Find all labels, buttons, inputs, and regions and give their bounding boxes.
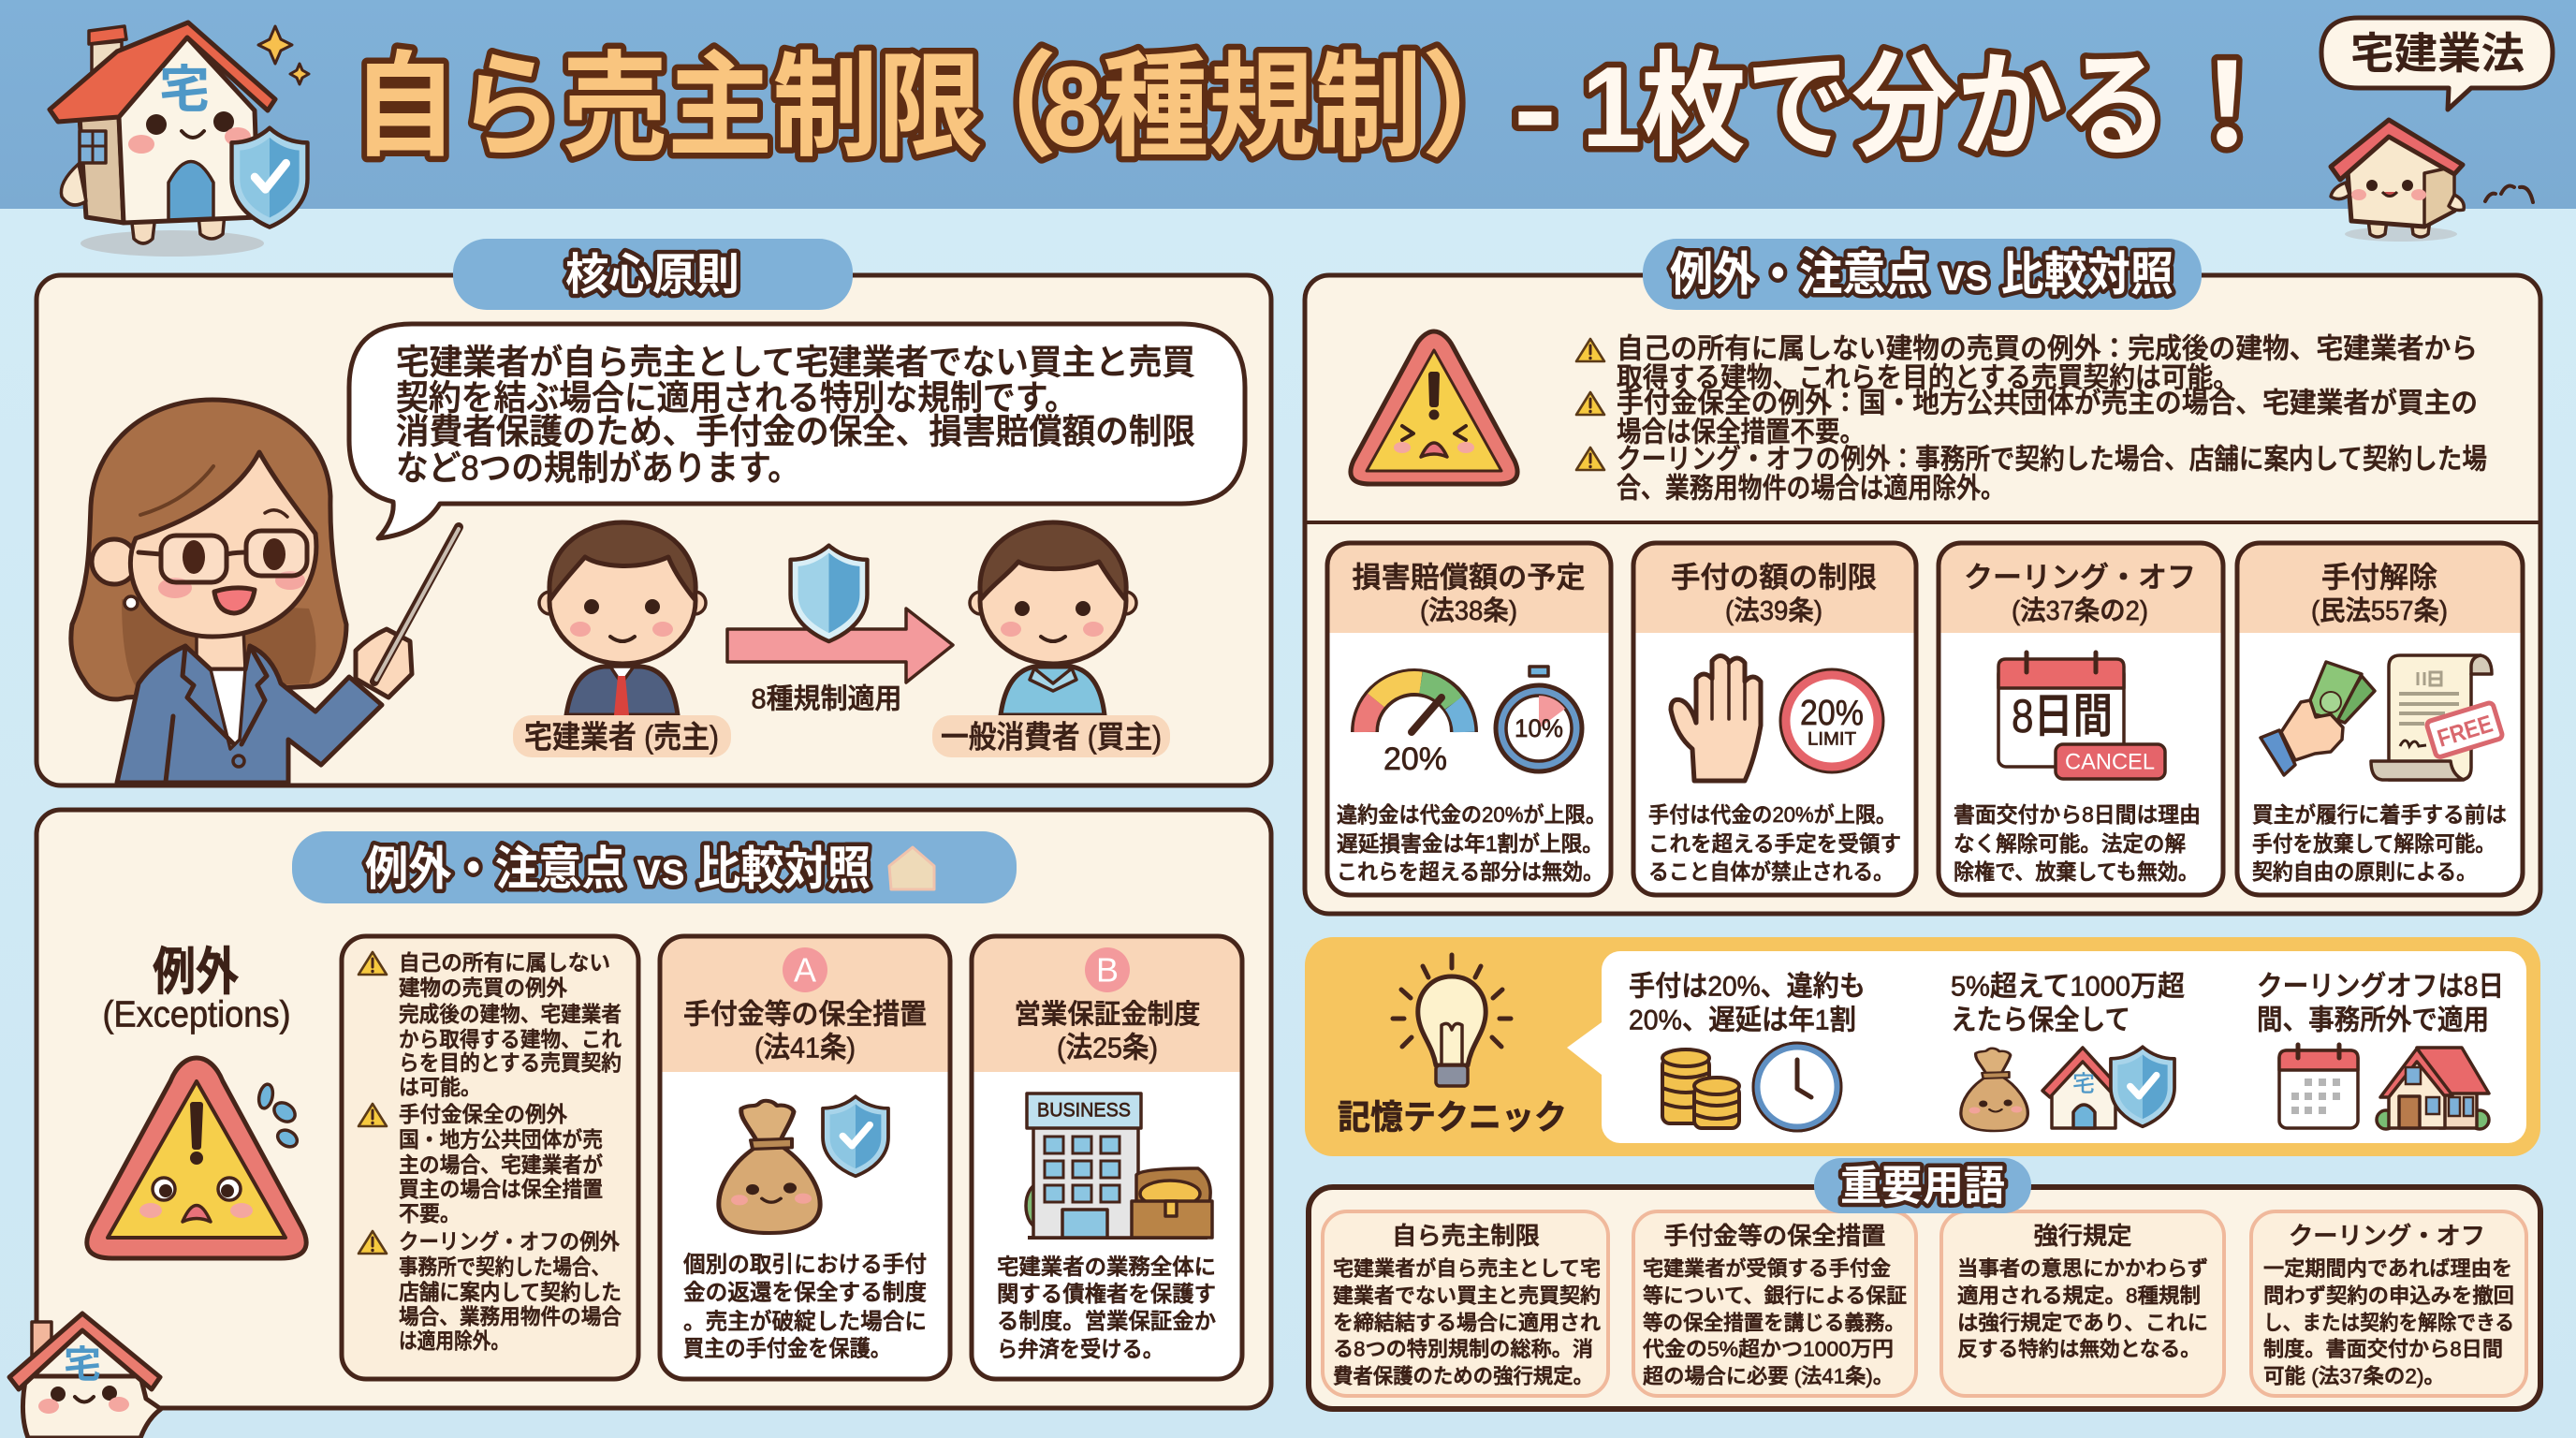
card: クーリング・オフ [1939,543,2223,895]
icon: contract paper with FREE stamp [2371,655,2503,780]
icon: large warning triangle [87,1058,306,1258]
term card: 強行規定 [1941,1211,2224,1396]
card B: 営業保証金制度: 関する債権者を保護す [997,1282,1216,1306]
card: 損害賠償額の予定: これらを超える部分は無効。 [1337,859,1603,884]
card B: 営業保証金制度 [972,936,1242,1379]
icon: calendar with cancel [1998,653,2165,779]
warning item 2: 買主の場合は保全措置 [399,1177,603,1201]
header band [0,0,2576,209]
term card: 手付金等の保全措置: 手付金等の保全措置 [1664,1222,1885,1250]
heading pill: 例外・注意点 vs 比較対照 [1670,248,2174,301]
card: 損害賠償額の予定: 20% [1383,741,1447,777]
warning item 1: らを目的とする売買契約 [399,1050,622,1075]
card: 手付解除: 手付を放棄して解除可能。 [2252,831,2496,856]
tip 1: 20%、遅延は年1割 [1629,1005,1856,1035]
card: クーリング・オフ: 除権で、放棄しても無効。 [1954,859,2199,884]
card: 損害賠償額の予定: (法38条) [1420,595,1517,626]
icon: house mascot bottom left: 宅 [64,1344,101,1386]
heading pill: 核心原則 [453,239,853,310]
term card: 強行規定: は強行規定であり、これに [1957,1311,2208,1335]
heading: 例外: 例外 [153,943,239,1001]
term card: クーリング・オフ: し、または契約を解除できる [2263,1311,2514,1335]
term card: 自ら売主制限: 建業者でない買主と売買契約 [1333,1284,1601,1307]
panel: 例外・注意点 vs 比較対照 (right) [1305,239,2540,914]
card A: 手付金等の保全措置: A [794,951,816,989]
icon: building and treasure chest: BUSINESS [1037,1099,1131,1122]
warning item 3: 事務所で契約した場合、 [399,1255,610,1279]
warning item 1: 完成後の建物、宅建業者 [399,1002,622,1026]
icon: contract paper with FREE stamp: FREE [2434,710,2496,753]
card A: 手付金等の保全措置 [660,936,950,1379]
icon: warning triangle [1351,331,1517,484]
card A: 手付金等の保全措置: 個別の取引における手付 [683,1253,927,1277]
term card: 自ら売主制限: る8つの特別規制の総称。消 [1333,1337,1593,1361]
heading pill: 核心原則: 核心原則 [565,249,739,300]
card: 損害賠償額の予定: 違約金は代金の20%が上限。 [1337,802,1606,827]
warning item 2 [359,1102,603,1225]
icon: house [2377,1048,2489,1129]
icon: hand with money [2261,662,2375,775]
term card: 手付金等の保全措置: 等の保全措置を講じる義務。 [1643,1311,1905,1335]
icon: clock [1753,1043,1841,1131]
card B: 営業保証金制度: B [1096,951,1119,989]
label: 一般消費者（買主）: 一般消費者 (買主) [941,719,1162,755]
title [352,43,2284,172]
warning item 3: 店舗に案内して契約した [399,1280,622,1304]
heading pill: 重要用語: 重要用語 [1840,1163,2005,1210]
term card: 手付金等の保全措置: 超の場合に必要 (法41条)。 [1643,1365,1894,1387]
title: 8種規制 [1043,43,1422,170]
icon: stopwatch [1496,667,1582,771]
tip 1 [1629,972,1866,1131]
card: 手付解除: (民法557条) [2311,595,2448,626]
card: 手付の額の制限: 手付の額の制限 [1671,562,1877,594]
icon: faded house [889,847,934,889]
warning item 1: 建物の売買の例外 [399,976,567,1000]
term card: クーリング・オフ: 問わず契約の申込みを撤回 [2263,1284,2514,1307]
card: 手付解除: 手付解除 [2321,562,2437,594]
title: 1枚で分かる [1582,43,2168,170]
warning list: 合、業務用物件の場合は適用除外。 [1617,474,2005,504]
icon: calendar with cancel: CANCEL [2065,749,2155,775]
term card: 強行規定: 当事者の意思にかかわらず [1957,1256,2208,1281]
panel: 記憶テクニック [1305,937,2540,1156]
term card: 強行規定: 反する特約は無効となる。 [1957,1337,2201,1361]
icon: calendar [2279,1045,2358,1128]
icon: gauge [1365,682,1464,732]
heading pill [292,831,1017,903]
icon: light bulb [1393,955,1511,1086]
term card: 手付金等の保全措置 [1633,1211,1916,1396]
character: seller [539,522,706,715]
term card: 自ら売主制限: 自ら売主制限 [1392,1222,1540,1250]
card B: 営業保証金制度: (法25条) [1057,1032,1158,1064]
panel: 核心原則 [37,239,1271,785]
icon: house mascot with shield [50,22,309,257]
tip 2 [1951,972,2185,1131]
card B: 営業保証金制度: る制度。営業保証金か [997,1309,1216,1333]
icon: house mascot with shield: 宅 [159,62,210,118]
card: 損害賠償額の予定: 損害賠償額の予定 [1352,562,1586,594]
warning list: 自己の所有に属しない建物の売買の例外：完成後の建物、宅建業者から [1617,333,2478,365]
card: クーリング・オフ: 書面交付から8日間は理由 [1954,802,2201,827]
card: 手付の額の制限: (法39条) [1725,595,1822,626]
tip 3: 間、事務所外で適用 [2257,1005,2489,1035]
title: （ [944,43,1058,170]
panel: 重要用語 [1309,1158,2540,1409]
character: teacher [71,400,459,783]
tip 3: クーリングオフは8日 [2257,972,2504,1002]
card: 損害賠償額の予定 [1327,543,1611,895]
icon: calendar with cancel: 8日間 [2012,690,2113,742]
warning item 1: 自己の所有に属しない [399,950,610,975]
term card: クーリング・オフ: 制度。書面交付から8日間 [2263,1337,2503,1361]
icon: 20% limit sign [1780,669,1883,772]
warning item 3: 場合、業務用物件の場合 [399,1304,622,1328]
badge: 宅建業法: 宅建業法 [2350,29,2525,78]
warning list: クーリング・オフの例外：事務所で契約した場合、店舗に案内して契約した場 [1617,444,2487,476]
term card: クーリング・オフ [2251,1211,2526,1396]
warning item 2: 国・地方公共団体が売 [399,1127,603,1152]
warning item 1: は可能。 [399,1075,481,1099]
speech bubble: 契約を結ぶ場合に適用される特別な規制です。 [396,378,1077,418]
warning list: 取得する建物、これらを目的とする売買契約は可能。 [1617,363,2239,393]
subheading: Exceptions: (Exceptions) [103,994,290,1035]
warning item 2: 手付金保全の例外 [399,1102,567,1126]
card: クーリング・オフ: (法37条の2) [2012,595,2148,626]
term card: 強行規定: 適用される規定。8種規制 [1957,1284,2201,1307]
tip 3 [2257,972,2504,1129]
card: 手付解除: 契約自由の原則による。 [2252,859,2477,884]
term card: 自ら売主制限: を締結結する場合に適用され [1333,1311,1601,1335]
icon: stopwatch: 10% [1515,714,1563,742]
card A: 手付金等の保全措置: 買主の手付金を保護。 [683,1337,891,1361]
icon: coins [1662,1049,1739,1128]
icon: 20% limit sign: 20% [1800,694,1864,733]
icon: bag, house, shield [1961,1047,2174,1131]
arrow: 8種規制適用 [727,546,953,715]
icon: small house mascot top right [2331,120,2533,242]
tip 2: 5%超えて1000万超 [1951,972,2185,1002]
label: 宅建業者（売主）: 宅建業者 (売主) [524,719,719,755]
card A: 手付金等の保全措置: 。売主が破綻した場合に [683,1309,927,1335]
panel: 例外・注意点 vs 比較対照 (left) [37,810,1271,1408]
term card: 強行規定: 強行規定 [2033,1222,2132,1250]
speech bubble: など8つの規制があります。 [396,449,800,487]
title: 自ら売主制限 [352,43,983,170]
warning item 3: は適用除外。 [399,1328,509,1353]
heading pill: 重要用語 [1814,1158,2031,1213]
speech bubble: 宅建業者が自ら売主として宅建業者でない買主と売買 [396,343,1195,382]
speech bubble: 消費者保護のため、手付金の保全、損害賠償額の制限 [396,412,1195,451]
term card: 自ら売主制限: 宅建業者が自ら売主として宅 [1333,1256,1601,1281]
warning item 3: クーリング・オフの例外 [399,1229,620,1254]
warning item 2: 不要。 [399,1201,461,1225]
title: ） [1421,43,1535,170]
card: 手付の額の制限: ること自体が禁止される。 [1648,859,1894,884]
term card: 手付金等の保全措置: 代金の5%超かつ1000万円 [1643,1337,1894,1361]
icon: money bag and shield [719,1096,888,1233]
icon: bag, house, shield: 宅 [2072,1071,2095,1097]
card: 損害賠償額の予定: 遅延損害金は年1割が上限。 [1337,831,1603,856]
term card: 自ら売主制限: 費者保護のための強行規定。 [1333,1365,1593,1387]
heading pill [1643,239,2202,310]
card: 手付の額の制限 [1633,543,1916,895]
speech bubble [349,324,1245,538]
card: 手付解除 [2237,543,2523,895]
warning item 1 [359,950,622,1099]
card: 手付の額の制限: これを超える手定を受領す [1648,831,1901,856]
badge: 宅建業法 [2321,18,2553,110]
card: クーリング・オフ: クーリング・オフ [1964,562,2196,594]
warning list: 手付金保全の例外：国・地方公共団体が売主の場合、宅建業者が買主の [1617,388,2478,419]
term card: クーリング・オフ: 可能 (法37条の2)。 [2263,1365,2445,1387]
card: クーリング・オフ: なく解除可能。法定の解 [1954,831,2186,856]
term card: 手付金等の保全措置: 等について、銀行による保証 [1643,1284,1907,1307]
term card: クーリング・オフ: 一定期間内であれば理由を [2263,1256,2512,1281]
arrow: 8種規制適用: 8種規制適用 [751,683,902,715]
icon: raised hand [1671,655,1761,781]
warning item 1: から取得する建物、これ [399,1027,622,1051]
card: 手付解除: 買主が履行に着手する前は [2252,802,2507,827]
heading pill: 例外・注意点 vs 比較対照 [365,843,871,895]
icon: building and treasure chest [1026,1093,1212,1238]
term card: 手付金等の保全措置: 宅建業者が受領する手付金 [1643,1256,1891,1281]
card B: 営業保証金制度: 営業保証金制度 [1015,999,1200,1030]
character: buyer [970,522,1136,715]
warning list: 場合は保全措置不要。 [1617,418,1865,448]
term card: 自ら売主制限 [1323,1211,1608,1396]
icon: house mascot bottom left [9,1313,161,1438]
warning list [1576,333,2487,504]
title: ！ [2170,43,2284,170]
card: 例外一覧 [342,936,638,1379]
card B: 営業保証金制度: 宅建業者の業務全体に [997,1255,1216,1279]
card A: 手付金等の保全措置: (法41条) [754,1032,856,1064]
card A: 手付金等の保全措置: 金の返還を保全する制度 [683,1281,927,1305]
heading: 記憶テクニック: 記憶テクニック [1338,1097,1567,1137]
title: - [1514,45,1557,172]
card: 手付の額の制限: 手付は代金の20%が上限。 [1648,802,1896,827]
tip 1: 手付は20%、違約も [1629,972,1866,1002]
icon: 20% limit sign: LIMIT [1808,730,1856,749]
term card: クーリング・オフ: クーリング・オフ [2289,1222,2485,1250]
card A: 手付金等の保全措置: 手付金等の保全措置 [683,1000,927,1030]
warning item 3 [359,1229,622,1353]
warning item 2: 主の場合、宅建業者が [399,1152,603,1177]
card B: 営業保証金制度: ら弁済を受ける。 [997,1337,1164,1361]
tip 2: えたら保全して [1951,1005,2130,1035]
